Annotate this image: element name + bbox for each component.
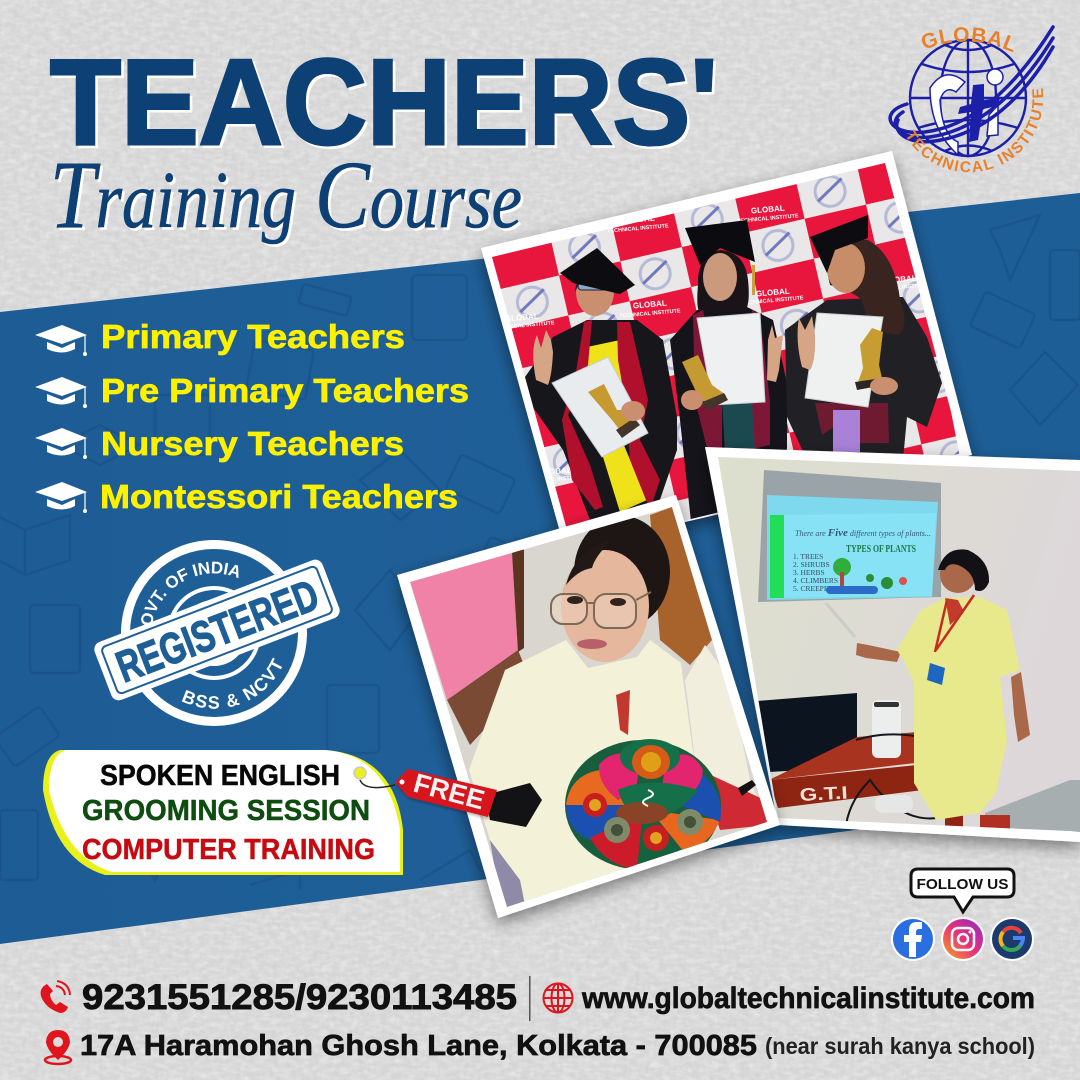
subtitle: Training Course: Course — [315, 141, 522, 248]
free price tag: FREE — [410, 768, 488, 815]
icon: globe — [544, 984, 572, 1012]
photo: teacher at projector screen — [700, 447, 1080, 842]
contact: address: 17A Haramohan Ghosh Lane, Kolkata - 700085 — [80, 1030, 757, 1062]
list item: Pre Primary Teachers: Pre Primary Teachers — [101, 372, 469, 409]
laptop — [758, 693, 857, 772]
logo swoosh and initials — [890, 27, 1053, 155]
banner logo text: TECHNICAL INSTITUTE — [493, 320, 555, 332]
banner logo text: TECHNICAL INSTITUTE — [607, 223, 669, 235]
list item: Nursery Teachers: Nursery Teachers — [101, 425, 404, 462]
black arm sleeves — [485, 783, 542, 827]
projection screen: 3. HERBS — [793, 568, 825, 577]
callout line: Grooming Session: GROOMING SESSION — [82, 795, 370, 827]
callout line: Spoken English: SPOKEN ENGLISH — [100, 760, 340, 792]
teacher figure — [856, 549, 1030, 830]
projector and cables — [846, 700, 936, 822]
banner logo text — [493, 204, 931, 486]
projection screen — [758, 470, 941, 602]
social icon: google — [990, 917, 1034, 961]
desk: G.T.I — [799, 783, 848, 805]
wall and door — [410, 553, 518, 700]
banner logo text: TECHNICAL INSTITUTE — [619, 308, 681, 320]
banner logo text: GLOBAL — [505, 312, 539, 323]
subtitle: Training Course: Training — [50, 141, 296, 248]
subtitle: Training Course — [50, 141, 522, 248]
projection screen: There are Five different types of plants... — [795, 527, 931, 539]
banner logo text: GLOBAL — [621, 214, 655, 225]
callout line: Computer Training: COMPUTER TRAINING — [82, 834, 375, 866]
floor — [985, 780, 1080, 832]
photo: graduates with certificates — [480, 150, 980, 560]
icon: map pin — [45, 1030, 71, 1064]
logo text TECHNICAL INSTITUTE: TECHNICAL INSTITUTE — [906, 88, 1044, 172]
registered stamp — [94, 540, 340, 726]
student body — [469, 640, 700, 907]
course list — [35, 318, 469, 515]
projection screen: 4. CLIMBERS — [793, 576, 838, 585]
title: TEACHERS': TEACHERS' — [50, 34, 718, 170]
list item: Montessori Teachers: Montessori Teachers — [100, 478, 458, 515]
contact: address: (near surah kanya school) — [765, 1033, 1035, 1059]
blue diagonal band with education icon pattern — [0, 193, 1080, 944]
free price tag — [354, 767, 497, 817]
skirt detail — [490, 840, 525, 907]
registered stamp: GOVT. OF INDIA — [141, 562, 238, 624]
photo: student holding craft — [397, 495, 780, 920]
banner logo text: GLOBAL — [633, 299, 667, 310]
registered stamp: BSS & NCVT — [182, 658, 282, 709]
banner logo text: GLOBAL — [538, 466, 572, 477]
social icon: instagram — [941, 917, 985, 961]
neighbour in white — [685, 645, 757, 828]
banner logo text: GLOBAL — [883, 274, 917, 285]
banner logo text: GLOBAL — [751, 204, 785, 215]
banner logo text: TECHNICAL INSTITUTE — [742, 295, 804, 307]
stamp label: REGISTERED — [92, 557, 342, 703]
banner logo text: GLOBAL — [756, 287, 790, 298]
social icon: facebook — [891, 917, 935, 961]
projection screen: 1. TREES — [793, 552, 823, 561]
contact: website: www.globaltechnicalinstitute.com — [581, 982, 1035, 1015]
contact: address — [45, 1030, 1035, 1064]
follow us speech bubble: FOLLOW US — [916, 876, 1008, 893]
divider — [529, 976, 530, 1021]
student hair and face — [574, 516, 670, 628]
banner logo text: TECHNICAL INSTITUTE — [737, 213, 799, 225]
banner logo text: TECHNICAL INSTITUTE — [524, 474, 586, 486]
graduate middle — [670, 220, 787, 540]
graduate right — [785, 215, 942, 460]
list item: Primary Teachers: Primary Teachers — [101, 318, 405, 355]
stamp label: REGISTERED: REGISTERED — [110, 571, 325, 692]
icon: phone — [41, 981, 70, 1013]
graduate left — [523, 248, 677, 520]
craft: painted clay diya plate — [565, 739, 721, 870]
projection screen: TYPES OF PLANTS — [846, 544, 916, 555]
banner logo text: TECHNICAL INSTITUTE — [869, 282, 931, 294]
logo text GLOBAL: GLOBAL — [922, 27, 1014, 52]
callout: free courses — [43, 750, 403, 875]
contact: phone numbers: 9231551285/9230113485 — [82, 978, 517, 1017]
follow us speech bubble — [911, 869, 1014, 912]
pointer stick — [826, 603, 855, 637]
projection screen: 5. CREEPERS — [793, 584, 838, 593]
logo: Global Technical Institute — [888, 25, 1055, 172]
logo globe — [910, 40, 1026, 156]
desk — [769, 730, 967, 829]
projection screen: 2. SHRUBS — [793, 560, 830, 569]
